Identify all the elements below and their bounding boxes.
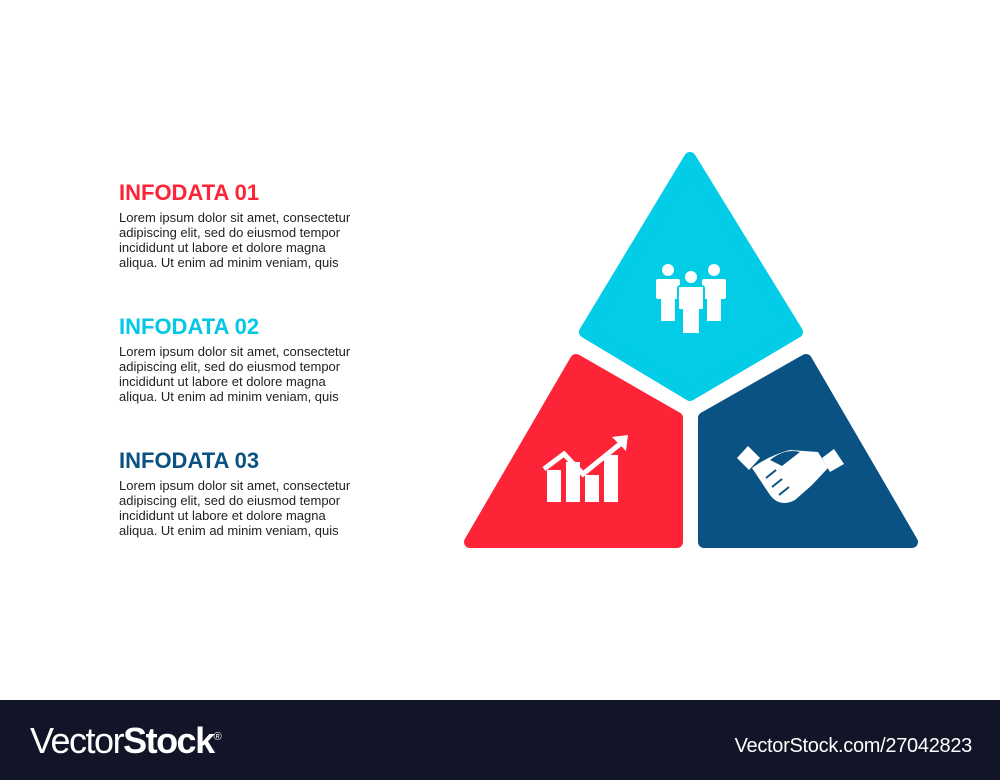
text block 03: INFODATA 03 (119, 448, 259, 473)
text block 03: adipiscing elit, sed do eiusmod tempor (119, 493, 340, 508)
segment: bottom-right blue (704, 360, 912, 542)
icon: people (656, 264, 726, 333)
icon: handshake (737, 446, 844, 503)
text block 01: Lorem ipsum dolor sit amet, consectetur (119, 210, 350, 225)
footer url: VectorStock.com/27042823 (735, 735, 972, 757)
text block 02: INFODATA 02 (119, 314, 259, 339)
text block 02: incididunt ut labore et dolore magna (119, 374, 326, 389)
segment: top cyan (585, 158, 797, 395)
text block 03: aliqua. Ut enim ad minim veniam, quis (119, 523, 339, 538)
icon: growth chart (544, 435, 628, 502)
text block 01: aliqua. Ut enim ad minim veniam, quis (119, 255, 339, 270)
text block 03: incididunt ut labore et dolore magna (119, 508, 326, 523)
text block 03 (119, 448, 350, 538)
segment: bottom-left red (470, 360, 677, 542)
text block 02 (119, 314, 350, 404)
footer logo: VectorStock® (30, 720, 220, 761)
text block 01: adipiscing elit, sed do eiusmod tempor (119, 225, 340, 240)
text block 03: Lorem ipsum dolor sit amet, consectetur (119, 478, 350, 493)
text block 01 (119, 180, 350, 270)
text block 02: adipiscing elit, sed do eiusmod tempor (119, 359, 340, 374)
text block 02: Lorem ipsum dolor sit amet, consectetur (119, 344, 350, 359)
text block 02: aliqua. Ut enim ad minim veniam, quis (119, 389, 339, 404)
text block 01: INFODATA 01 (119, 180, 259, 205)
text block 01: incididunt ut labore et dolore magna (119, 240, 326, 255)
footer bar (0, 700, 1000, 780)
